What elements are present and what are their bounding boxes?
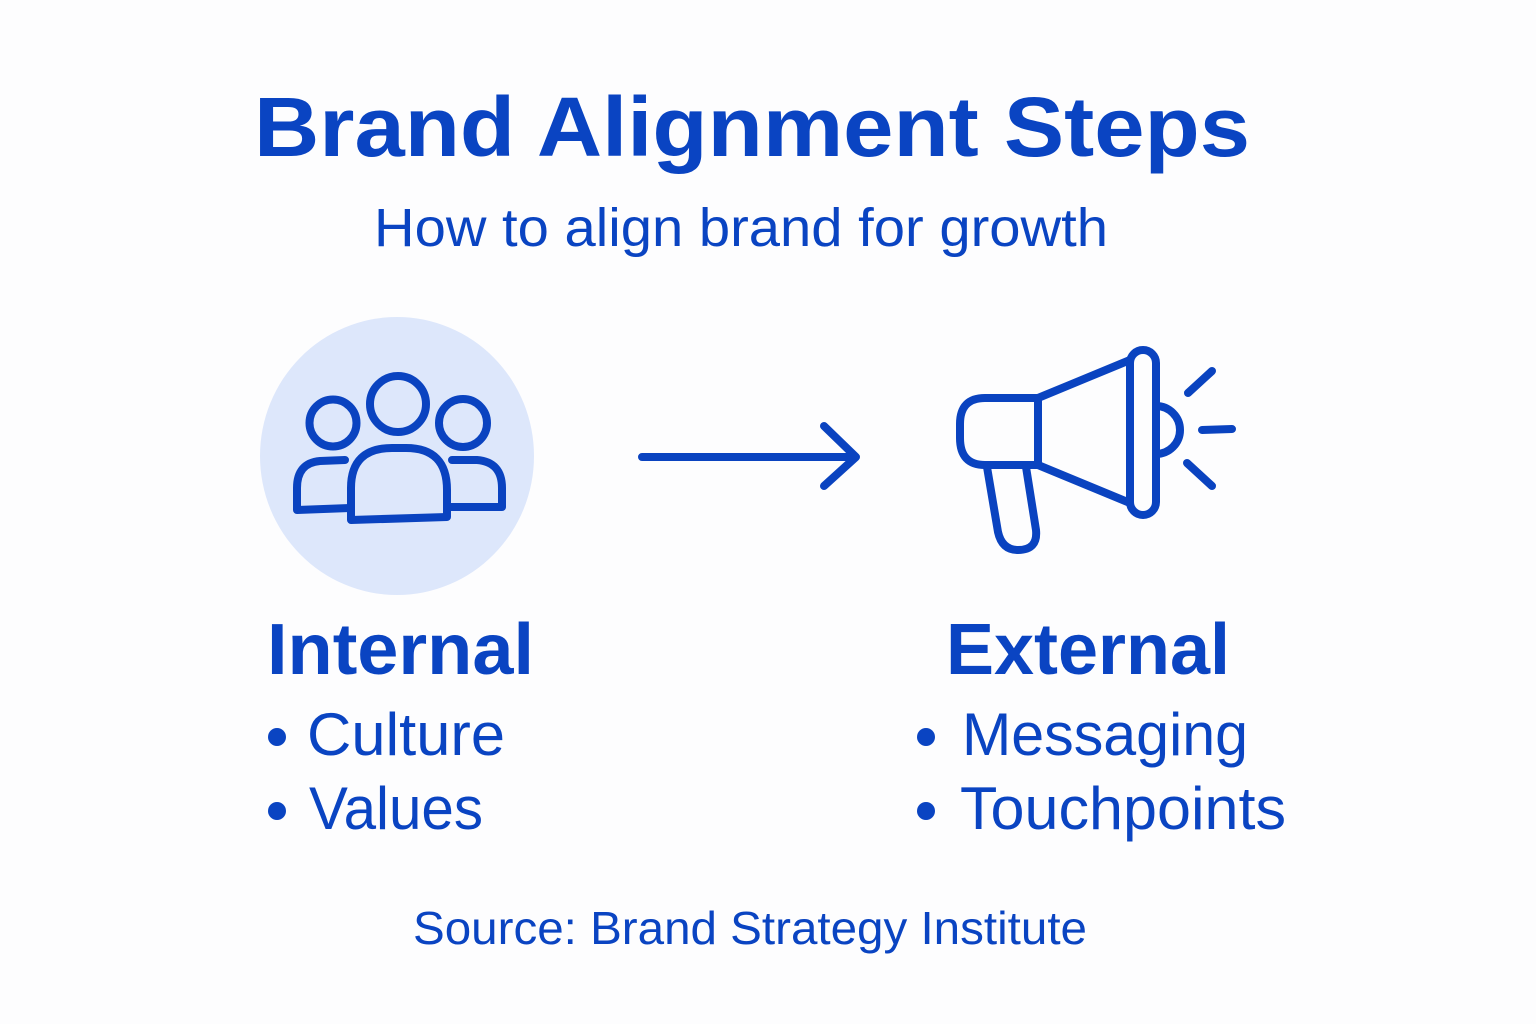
source note: Source: Brand Strategy Institute	[413, 902, 1087, 954]
list: external items: Touchpoints	[960, 775, 1286, 842]
icon: people in circle	[260, 317, 534, 595]
arrow	[642, 426, 856, 486]
list: internal items: Culture	[307, 701, 505, 768]
list: external items: Messaging	[962, 701, 1248, 768]
heading: external: External	[946, 610, 1230, 690]
icon: megaphone	[960, 350, 1232, 550]
panel: external	[917, 350, 1286, 842]
list: internal items: Values	[309, 775, 483, 842]
subtitle: How to align brand for growth	[374, 198, 1108, 258]
list: internal items	[268, 701, 505, 842]
list: external items	[917, 701, 1286, 842]
panel: internal	[260, 317, 534, 842]
title: Brand Alignment Steps	[254, 80, 1250, 174]
heading: internal: Internal	[267, 610, 534, 690]
